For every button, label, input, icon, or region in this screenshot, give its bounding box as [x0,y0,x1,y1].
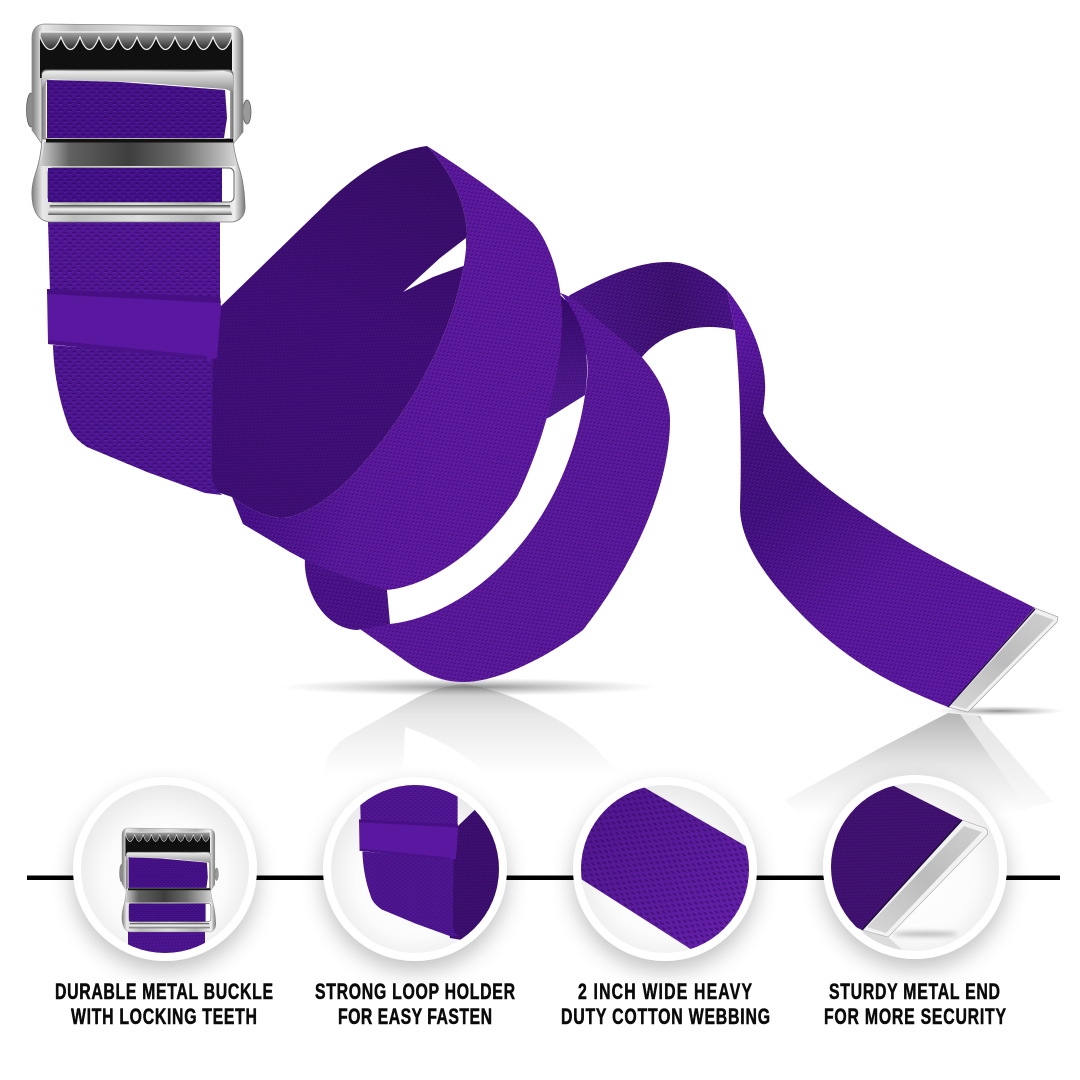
caption: STRONG LOOP HOLDER [315,981,515,1005]
right strap arch [560,262,735,380]
feature: metal buckle [55,777,273,1030]
floor shadows [280,678,1065,716]
lower loop underside [305,558,390,630]
strap above holder [48,220,220,300]
circle frame [73,777,257,961]
circle frame [323,777,507,961]
centre plate [40,142,237,166]
circle frame [573,777,757,961]
upper frame [32,24,243,144]
gap in large loop [403,238,466,292]
caption: FOR EASY FASTEN [338,1006,492,1030]
right strap tail [727,290,1035,707]
caption [55,981,273,1030]
reflection: metal tip on glossy floor [785,713,1053,835]
loop holder [47,289,221,360]
reflection: loop on glossy floor [320,684,640,800]
feature: cotton webbing [560,768,770,1030]
locking teeth [40,32,232,50]
feature: metal end [820,775,1007,1030]
caption: WITH LOCKING TEETH [71,1006,257,1030]
divider line [27,876,1060,880]
slider top bar [42,71,233,92]
belt: full product [26,24,1058,712]
caption: STURDY METAL END [829,981,1000,1005]
caption [824,981,1006,1030]
circle frame [823,775,1007,959]
metal tip [948,608,1058,712]
bottom bar highlight [48,205,232,215]
feature: loop holder [315,777,520,1030]
strap through slider [47,80,227,138]
caption: 2 INCH WIDE HEAVY [578,981,752,1005]
strap in lower slot [48,168,234,202]
large loop inner surface [205,146,467,518]
dark interior [40,34,232,78]
icon: holder close-up [359,785,499,940]
inner strip between loops [538,292,587,422]
lower frame [32,139,245,222]
caption: DUTY COTTON WEBBING [561,1006,770,1030]
icon: mini buckle [120,828,218,965]
caption: FOR MORE SECURITY [824,1006,1006,1030]
icon: metal end close-up [831,786,988,950]
side pins [26,93,251,127]
strap below holder [53,345,222,495]
icon: webbing close-up [581,788,749,949]
caption [561,981,770,1030]
large loop front band [232,146,562,590]
slider bar [42,70,233,142]
lower loop band [357,293,670,682]
caption [315,981,515,1030]
buckle strap and holder [47,220,222,495]
metal buckle [26,24,251,222]
caption: DURABLE METAL BUCKLE [55,981,273,1005]
